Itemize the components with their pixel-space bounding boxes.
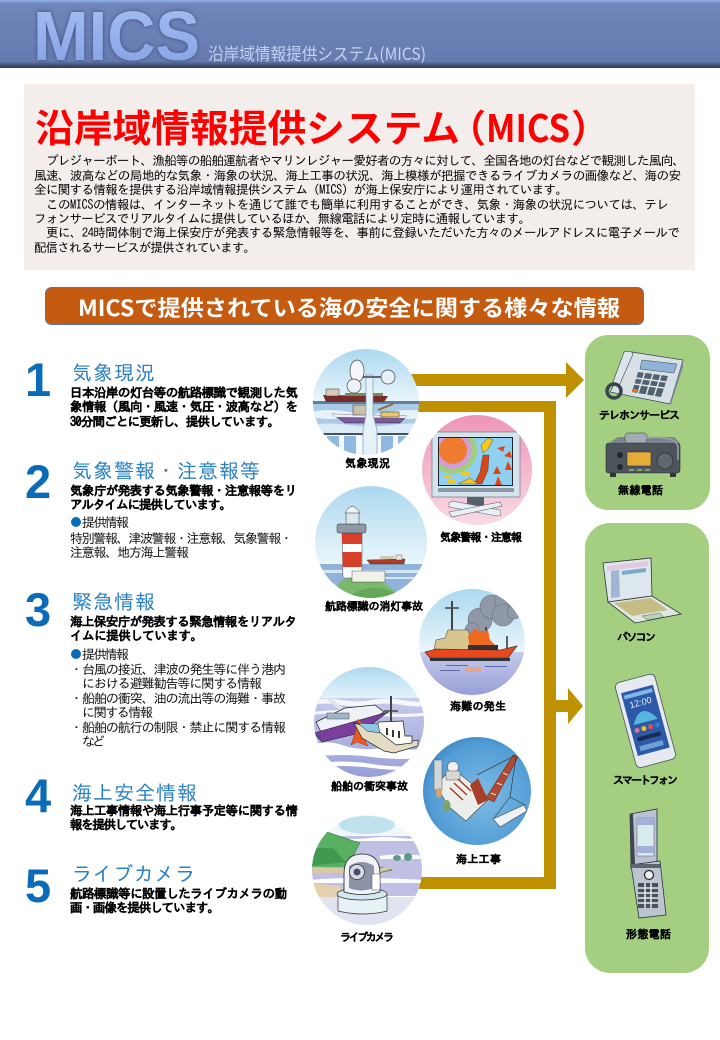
label: mobile phone: 形態電話	[626, 928, 671, 940]
item 3: 台風の接近、津波の発生等に伴う港内	[82, 663, 286, 676]
section banner: MICSで提供されている海の安全に関する様々な情報	[78, 291, 620, 323]
intro paragraph: 全に関する情報を提供する沿岸域情報提供システム（MICS）が海上保安庁により運用されています。	[34, 183, 568, 196]
panel: telephone and radio	[585, 335, 710, 510]
intro paragraph: 配信されるサービスが提供されています。	[34, 241, 256, 254]
icon: desk telephone	[607, 351, 683, 404]
item 5: ライブカメラ	[72, 863, 195, 884]
item 1: 30分間ごとに更新し、提供しています。	[70, 415, 280, 428]
item 5: 画・画像を提供しています。	[70, 900, 220, 914]
title: MICS	[486, 98, 570, 153]
item 3: 3	[25, 583, 51, 636]
panel: internet devices	[585, 523, 709, 973]
item 3: 船舶の航行の制限・禁止に関する情報	[82, 720, 286, 734]
intro paragraph	[34, 154, 685, 254]
item 5: 航路標識等に設置したライブカメラの動	[70, 887, 287, 900]
icon: laptop	[603, 558, 681, 623]
item 5	[25, 859, 287, 914]
arrow: top to telephone panel	[410, 362, 584, 398]
label: weather warnings: 気象警報・注意報	[440, 530, 522, 543]
item 2: 気象警報・注意報等	[72, 461, 260, 481]
intro paragraph: 更に、24時間体制で海上保安庁が発表する緊急情報等を、事前に登録いただいた方々のメールアドレスに電子メールで	[46, 226, 680, 239]
item 3: 緊急情報	[72, 592, 155, 612]
arrow: bracket to internet panel	[410, 401, 583, 889]
illustration: live camera	[312, 815, 422, 925]
icon: smartphone: 12:00	[628, 695, 653, 710]
label: ship collision: 船舶の衝突事故	[331, 780, 408, 792]
item 1: 気象現況	[72, 363, 155, 383]
item 2: 特別警報、津波警報・注意報、気象警報・	[70, 532, 293, 545]
item 3: ・	[70, 721, 83, 734]
boat: purple	[314, 698, 388, 742]
label: radio telephone: 無線電話	[618, 484, 663, 496]
title: （	[448, 98, 486, 153]
item 3: に関する情報	[82, 706, 153, 719]
label: marine construction: 海上工事	[456, 853, 501, 865]
item 4: 報を提供しています。	[70, 818, 183, 831]
illustration: weather observation	[313, 349, 419, 455]
title: 沿岸域情報提供システム	[35, 98, 460, 153]
item 4	[25, 769, 298, 831]
label: smartphone: スマートフォン	[613, 774, 678, 786]
illustration: ship collision	[314, 667, 424, 777]
intro paragraph: フォンサービスでリアルタイムに提供しているほか、無線電話により定時に通報しています。	[34, 212, 531, 225]
crane	[477, 755, 527, 827]
item 4: 海上工事情報や海上行事予定等に関する情	[70, 804, 298, 817]
item 3: ・	[70, 692, 83, 705]
label: lighthouse outage: 航路標識の消灯事故	[325, 600, 423, 612]
item 2: 2	[25, 455, 51, 508]
item 1	[25, 353, 298, 428]
header subtitle: 沿岸域情報提供システム(MICS)	[208, 40, 426, 65]
icon: flip phone	[630, 809, 666, 918]
illustration: lighthouse	[312, 484, 430, 600]
label: weather observation: 気象現況	[345, 456, 390, 469]
item 2: 提供情報	[82, 516, 129, 529]
item 2: アルタイムに提供しています。	[70, 498, 232, 511]
item 3: イムに提供しています。	[70, 629, 203, 642]
anemometer	[347, 360, 395, 456]
item 4: 4	[25, 769, 51, 822]
panel: introduction	[24, 84, 695, 270]
item 3: 船舶の衝突、油の流出等の海難・事故	[82, 691, 286, 705]
illustration: maritime accident ship fire	[417, 587, 527, 696]
intro paragraph: プレジャーボート、漁船等の船舶運航者やマリンレジャー愛好者の方々に対して、全国各地の灯台などで観測した風向、	[46, 154, 685, 167]
boat: white	[354, 696, 418, 753]
item 1: 1	[25, 353, 51, 406]
item 5: 5	[25, 859, 51, 912]
item 3	[25, 583, 297, 748]
item 2: 気象庁が発表する気象警報・注意報等をリ	[70, 483, 297, 497]
item 3: 提供情報	[82, 648, 129, 661]
item 4: 海上安全情報	[72, 783, 197, 803]
title: ）	[571, 98, 609, 153]
label: telephone service: テレホンサービス	[599, 409, 680, 421]
icon: smartphone	[614, 673, 677, 769]
item 2: 注意報、地方海上警報	[70, 546, 189, 559]
barge	[434, 760, 490, 821]
item 3: ・	[70, 663, 83, 676]
item 3: など	[82, 735, 105, 748]
intro paragraph: 風速、波高などの局地的な気象・海象の状況、海上工事の状況、海上模様が把握できるライブカメラの画像など、海の安	[34, 169, 681, 182]
label: live camera: ライブカメラ	[340, 931, 394, 943]
illustration: weather warnings monitor	[420, 413, 534, 527]
item 1: 日本沿岸の灯台等の航路標識で観測した気	[70, 386, 298, 399]
intro paragraph: このMICSの情報は、インターネットを通じて誰でも簡単に利用することができ、気象・海象の状況については、テレ	[46, 198, 669, 211]
far ship	[323, 389, 388, 402]
item 2	[25, 455, 297, 559]
illustration: marine construction	[423, 737, 531, 845]
item 3: における避難勧告等に関する情報	[82, 676, 262, 690]
item 1: 象情報（風向・風速・気圧・波高など）を	[70, 399, 298, 413]
icon: radio transceiver	[606, 433, 680, 477]
header banner	[0, 0, 720, 75]
label: maritime accident: 海難の発生	[450, 700, 506, 712]
item 3: 海上保安庁が発表する緊急情報をリアルタ	[70, 614, 297, 628]
label: personal computer: パソコン	[617, 631, 656, 643]
near ship	[332, 404, 407, 423]
